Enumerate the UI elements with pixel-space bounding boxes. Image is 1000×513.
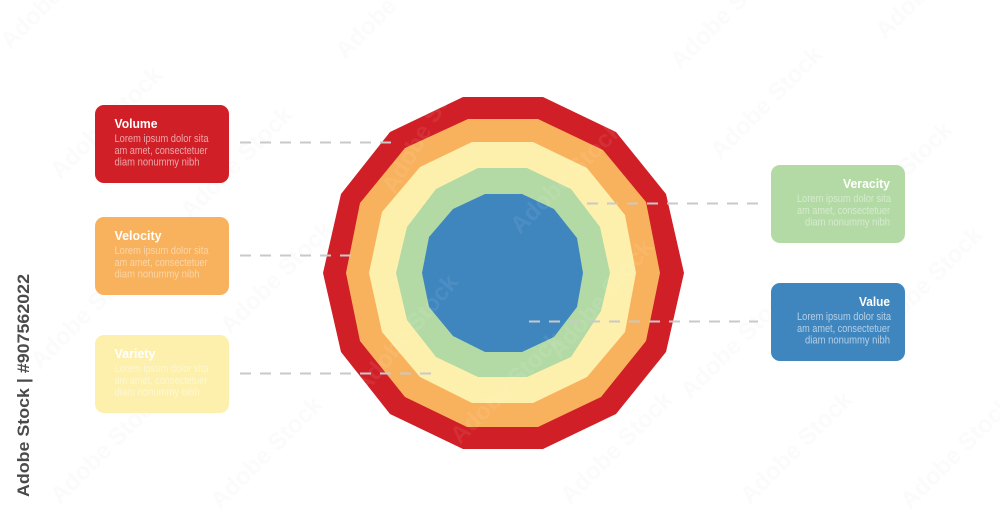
- panel: volume: [95, 105, 229, 183]
- connector: veracity: [587, 202, 758, 204]
- text block: variety: diam nonummy nibh: [114, 386, 200, 398]
- layer: variety (yellow): [369, 142, 636, 403]
- text block: velocity: Lorem ipsum dolor sita: [114, 245, 208, 257]
- text block: velocity: am amet, consectetuer: [114, 257, 208, 269]
- text: Adobe Stock: [675, 281, 798, 404]
- text: Adobe Stock: [175, 101, 298, 224]
- text block: velocity: [114, 245, 208, 280]
- text: Adobe Stock: [45, 386, 168, 509]
- layer: velocity (orange): [346, 119, 660, 427]
- panel: velocity: [95, 217, 229, 295]
- layer: veracity (green): [396, 168, 610, 377]
- text block: value: diam nonummy nibh: [805, 334, 890, 346]
- text block: variety: [114, 363, 208, 398]
- text: Adobe Stock: [45, 61, 168, 184]
- text block: volume: diam nonummy nibh: [114, 156, 200, 168]
- heading: volume: Volume: [114, 117, 158, 131]
- panel: variety: [95, 335, 229, 413]
- connector: variety: [240, 372, 432, 374]
- text block: veracity: Lorem ipsum dolor sita: [797, 193, 891, 205]
- text block: velocity: diam nonummy nibh: [114, 268, 200, 280]
- text: Adobe Stock: [215, 216, 338, 339]
- text: Adobe Stock: [445, 326, 568, 449]
- text: Adobe Stock: [349, 269, 464, 399]
- connector: value: [529, 320, 758, 322]
- heading: value: Value: [859, 295, 890, 309]
- panel: veracity: [771, 165, 905, 243]
- text block: variety: Lorem ipsum dolor sita: [114, 363, 208, 375]
- text: Adobe Stock: [555, 386, 678, 509]
- stock credit: Adobe Stock | #907562022: [14, 274, 33, 497]
- text: Adobe Stock: [544, 234, 659, 364]
- layer: volume (red): [323, 97, 684, 449]
- text: Adobe Stock: [735, 386, 858, 509]
- heading: variety: Variety: [114, 347, 156, 361]
- heading: velocity: Velocity: [114, 229, 162, 243]
- layer: value (blue): [422, 194, 583, 352]
- connector: volume: [240, 142, 392, 144]
- text: Adobe Stock: [865, 221, 988, 344]
- text: Adobe Stock: [835, 116, 958, 239]
- text block: variety: am amet, consectetuer: [114, 375, 208, 387]
- panel: value: [771, 283, 905, 361]
- text block: volume: [114, 133, 208, 168]
- connector: velocity: [240, 254, 351, 256]
- text block: value: Lorem ipsum dolor sita: [797, 311, 891, 323]
- text block: veracity: diam nonummy nibh: [805, 216, 890, 228]
- text: Adobe Stock: [505, 116, 628, 239]
- text block: volume: am amet, consectetuer: [114, 145, 208, 157]
- text block: volume: Lorem ipsum dolor sita: [114, 133, 208, 145]
- text: Adobe Stock: [377, 57, 474, 198]
- text block: value: am amet, consectetuer: [797, 323, 890, 335]
- chart: concentric polygon layers: [323, 97, 684, 449]
- text block: value: [797, 311, 891, 346]
- text: Adobe Stock: [25, 251, 148, 374]
- text block: veracity: [797, 193, 891, 228]
- text: Adobe Stock: [205, 391, 328, 513]
- text block: veracity: am amet, consectetuer: [797, 205, 890, 217]
- heading: veracity: Veracity: [843, 177, 890, 191]
- text: Adobe Stock: [705, 41, 828, 164]
